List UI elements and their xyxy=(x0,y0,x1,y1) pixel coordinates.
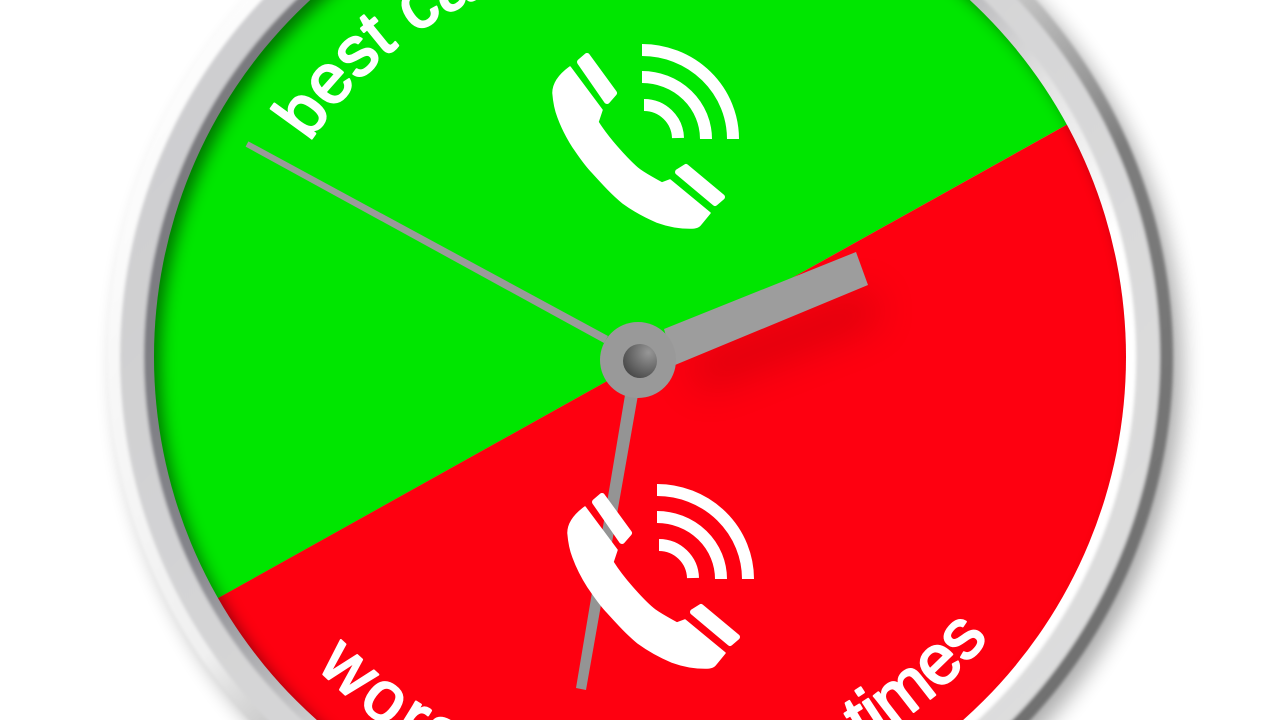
minute hand xyxy=(246,141,608,343)
red segment: worst call times xyxy=(218,124,1126,720)
clock face xyxy=(154,0,1126,720)
hour hand shadow xyxy=(690,290,880,390)
icon: phone on red xyxy=(568,490,748,668)
face inner edge shadow xyxy=(146,0,1150,720)
hour hand xyxy=(664,252,868,365)
green segment: best call times xyxy=(154,0,1067,598)
icon: phone on green xyxy=(553,50,733,228)
center hub xyxy=(600,322,676,398)
hub cap xyxy=(623,344,657,378)
second hand xyxy=(576,395,638,690)
